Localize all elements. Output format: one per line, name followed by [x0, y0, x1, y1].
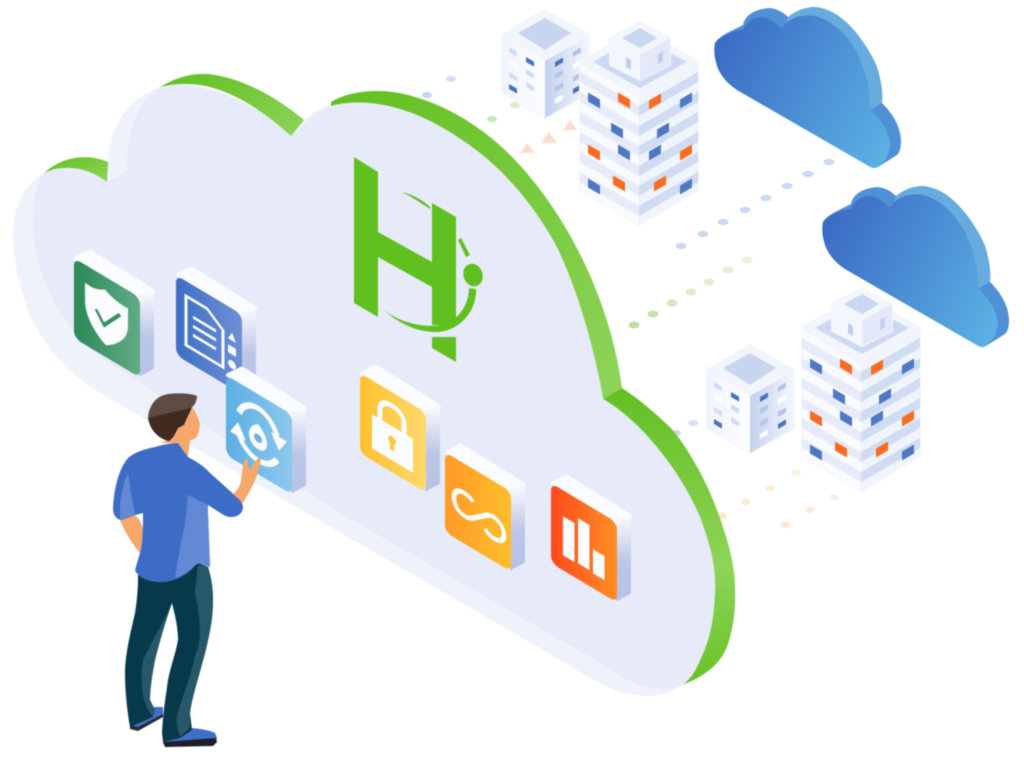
arm skin [120, 515, 143, 553]
tile: blue document [176, 268, 255, 395]
building: small lower block [707, 345, 794, 453]
building: small top block [502, 10, 589, 118]
icon: rotating arrows and eye [230, 391, 287, 478]
icon: infinity loop [454, 487, 504, 545]
building: tall top tower [580, 22, 698, 225]
connection dots: blue path to upper cloud [676, 159, 834, 249]
connection dots: lower right path to lower buildings [671, 420, 839, 528]
green rim: lower right lobe [603, 388, 735, 685]
shoes [130, 707, 217, 747]
logo: H with orbit [354, 157, 486, 362]
building: tall lower tower [802, 288, 920, 491]
tile: yellow padlock [360, 366, 439, 493]
icon: bar chart [563, 509, 604, 580]
cloud side silhouette [13, 87, 682, 696]
shirt shading [120, 473, 210, 578]
tile: cyan sync eye [226, 368, 305, 495]
green rim: top lobe [160, 74, 304, 136]
trousers [125, 563, 213, 742]
tile: red bar chart [551, 476, 630, 603]
green rim: small left lobe [44, 157, 108, 182]
neck and face [160, 407, 200, 457]
icon: padlock [372, 394, 413, 473]
icon: shield check [85, 278, 128, 358]
hand and forearm [233, 457, 261, 503]
connection dots: green path to lower cloud [628, 256, 752, 328]
main cloud [13, 74, 735, 696]
tile: orange infinity [445, 446, 524, 572]
green rim: large right lobe [331, 91, 622, 399]
hair [148, 393, 197, 441]
cloud front face [33, 85, 715, 689]
connection dots: top path to upper buildings [422, 76, 577, 153]
cloud: upper right blue cloud [714, 7, 901, 168]
trousers highlight [142, 565, 213, 737]
cloud: lower right blue cloud [822, 186, 1009, 347]
tile: green shield [74, 252, 153, 378]
icon: document list [186, 296, 236, 375]
shirt [113, 443, 243, 582]
person pressing tile [113, 393, 261, 747]
